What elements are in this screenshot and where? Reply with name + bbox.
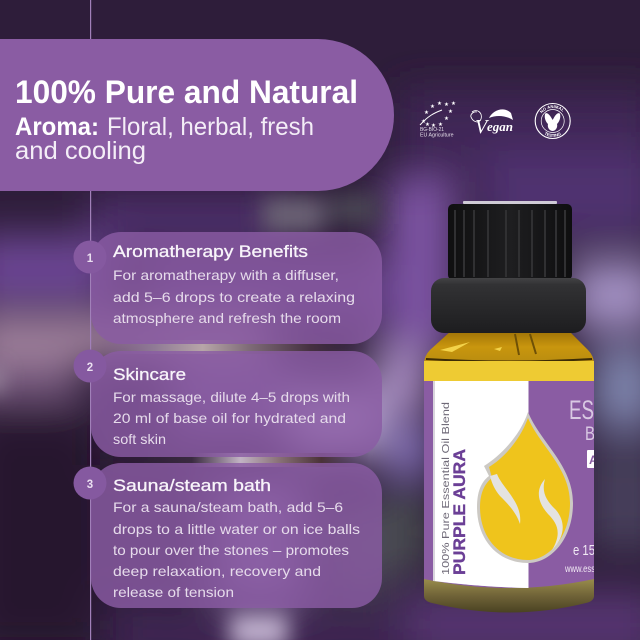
icon: EU organic leaf: ★: [438, 121, 443, 128]
body text: release of tension: [113, 584, 234, 600]
vertical timeline line: [90, 0, 91, 640]
body text: add 5–6 drops to create a relaxing: [113, 289, 355, 305]
label: [424, 381, 598, 588]
body text: For aromatherapy with a diffuser,: [113, 267, 339, 283]
product bottle: [424, 330, 598, 612]
light streak between cards 1 and 2: [100, 340, 370, 354]
text: aroma: Floral, herbal, fresh: [107, 113, 314, 141]
icon: EU organic leaf: ★: [444, 115, 449, 122]
icon: Vegan: V: [475, 116, 490, 138]
body text: drops to a little water or on ice balls: [113, 521, 360, 537]
icon: EU organic leaf: ★: [437, 100, 442, 107]
body text: [113, 499, 360, 600]
text: aroma: and cooling: [15, 137, 146, 165]
number badge 3: [74, 466, 106, 500]
body text: 20 ml of base oil for hydrated and: [113, 410, 346, 426]
icon: EU organic leaf: ★: [424, 109, 429, 116]
brand text: [565, 400, 594, 572]
body text: soft skin: [113, 431, 166, 447]
icon: EU organic leaf: [420, 100, 456, 138]
brand text: ES: [569, 395, 594, 425]
icon: EU organic leaf: ★: [425, 121, 430, 128]
brand text: B: [585, 424, 595, 445]
panel: step 3 sauna/steam bath: [74, 463, 382, 608]
icon: EU organic leaf: BG-BIO-21: [420, 127, 444, 133]
number badge 1: [74, 240, 106, 274]
bottle cap: [431, 201, 586, 333]
number badge 2: [74, 350, 106, 382]
icon: EU organic leaf: ★: [448, 108, 453, 115]
brand text: A: [589, 453, 598, 467]
light streak between cards 2 and 3: [100, 453, 370, 467]
number badge 3: 3: [87, 479, 93, 491]
brand text: e 15: [573, 542, 595, 559]
text: aroma: [15, 113, 314, 165]
label text: product name: PURPLE AURA: [450, 449, 469, 575]
body text: For massage, dilute 4–5 drops with: [113, 389, 350, 405]
icon: oil drop: [477, 412, 573, 563]
cap ribbed top: [448, 201, 572, 280]
body text: [113, 389, 350, 447]
body text: to pour over the stones – promotes: [113, 542, 349, 558]
icon: no animal testing: NO ANIMAL: [540, 105, 564, 114]
icon: EU organic leaf: ★: [451, 100, 456, 107]
amber shoulder: [424, 333, 594, 361]
body text: atmosphere and refresh the room: [113, 310, 341, 326]
heading: Sauna/steam bath: [113, 476, 271, 495]
panel: step 1 aromatherapy benefits: [74, 232, 382, 344]
icon: Vegan: egan: [487, 119, 513, 134]
panel: step 2 skincare: [74, 350, 382, 457]
number badge 1: 1: [87, 253, 94, 265]
number badge 2: 2: [87, 362, 93, 374]
yellow oil band: [424, 361, 594, 381]
heading: Aromatherapy Benefits: [113, 242, 308, 261]
icon: EU organic leaf: ★: [444, 101, 449, 108]
icon: EU organic leaf: ★: [421, 118, 426, 125]
icon: EU organic leaf: EU Agriculture: [420, 132, 454, 138]
heading: 100% Pure and Natural: 100% Pure and Natural: [15, 74, 358, 110]
cap collar: [431, 278, 586, 333]
icon: no animal testing: [534, 103, 571, 139]
body text: [113, 267, 355, 326]
panel: header: [0, 39, 394, 191]
body text: deep relaxation, recovery and: [113, 563, 321, 579]
heading: Skincare: [113, 365, 186, 384]
icon: EU organic leaf: ★: [430, 103, 435, 110]
icon: no animal testing: TESTING: [545, 132, 561, 137]
body text: For a sauna/steam bath, add 5–6: [113, 499, 343, 515]
icon: Vegan: [471, 109, 513, 138]
brand text: www.ess: [564, 564, 595, 575]
text: aroma: Aroma:: [15, 113, 99, 141]
certification logos: [420, 100, 571, 139]
label text: blend: 100% Pure Essential Oil Blend: [440, 402, 452, 575]
icon: EU organic leaf: ★: [431, 122, 436, 129]
bottle base: [424, 579, 594, 612]
